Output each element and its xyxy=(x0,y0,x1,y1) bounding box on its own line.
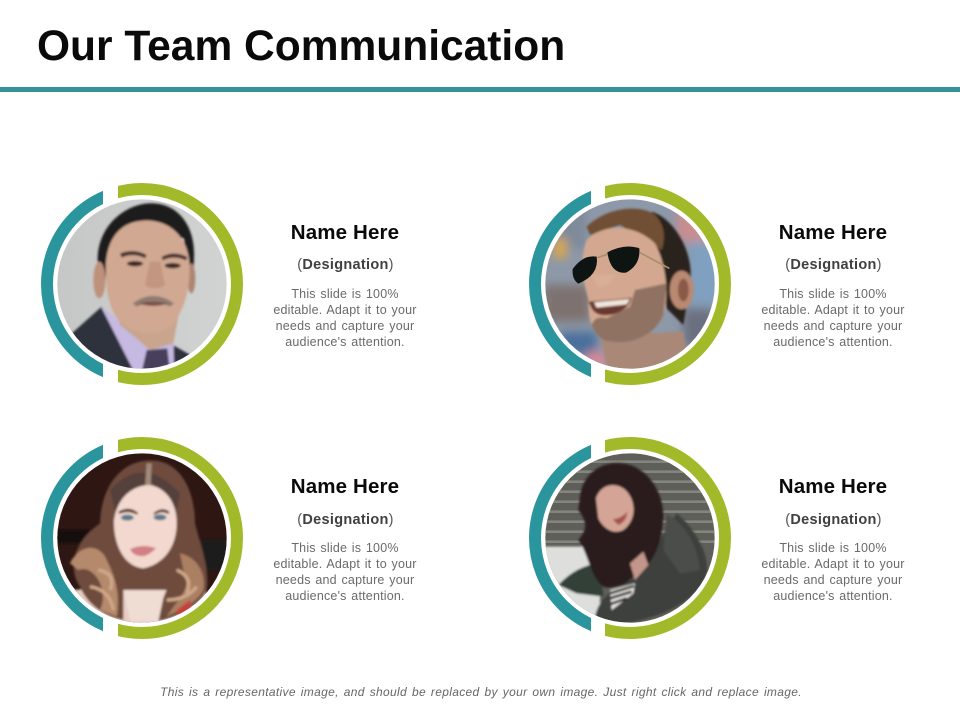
team member card 3 xyxy=(47,443,417,637)
team member card 1 xyxy=(47,189,417,382)
title: Our Team Communication xyxy=(37,23,565,70)
sunglasses xyxy=(607,247,639,273)
photo: man in suit xyxy=(57,199,227,369)
photo: smiling man with sunglasses xyxy=(545,199,715,369)
description: audience's attention. xyxy=(285,335,405,349)
description: needs and capture your xyxy=(764,573,902,587)
description: This slide is 100% xyxy=(779,287,887,301)
ring: teal and green arcs xyxy=(47,443,237,633)
header rule xyxy=(0,87,960,92)
footnote: This is a representative image, and should be replaced by your own image. Just right click and replace image. xyxy=(160,685,802,699)
team member card 4 xyxy=(535,443,905,633)
name: Name Here xyxy=(291,221,399,244)
designation: (Designation) xyxy=(785,257,882,273)
team member card 2 xyxy=(535,189,905,382)
description: needs and capture your xyxy=(276,573,414,587)
description: audience's attention. xyxy=(285,589,405,603)
designation: (Designation) xyxy=(785,512,882,528)
description: editable. Adapt it to your xyxy=(761,557,905,571)
description: needs and capture your xyxy=(276,319,414,333)
ring: teal and green arcs xyxy=(47,189,237,379)
description: editable. Adapt it to your xyxy=(273,557,417,571)
description: This slide is 100% xyxy=(291,287,399,301)
description: audience's attention. xyxy=(773,589,893,603)
designation: (Designation) xyxy=(297,257,394,273)
description: This slide is 100% xyxy=(291,541,399,555)
description: This slide is 100% xyxy=(779,541,887,555)
description: editable. Adapt it to your xyxy=(273,303,417,317)
designation: (Designation) xyxy=(297,512,394,528)
ring: teal and green arcs xyxy=(535,189,725,379)
description: audience's attention. xyxy=(773,335,893,349)
description: editable. Adapt it to your xyxy=(761,303,905,317)
name: Name Here xyxy=(291,475,399,498)
name: Name Here xyxy=(779,475,887,498)
description: needs and capture your xyxy=(764,319,902,333)
photo: woman in leather jacket xyxy=(545,453,715,623)
photo: woman with curled hair xyxy=(57,453,227,623)
ring: teal and green arcs xyxy=(535,443,725,633)
name: Name Here xyxy=(779,221,887,244)
